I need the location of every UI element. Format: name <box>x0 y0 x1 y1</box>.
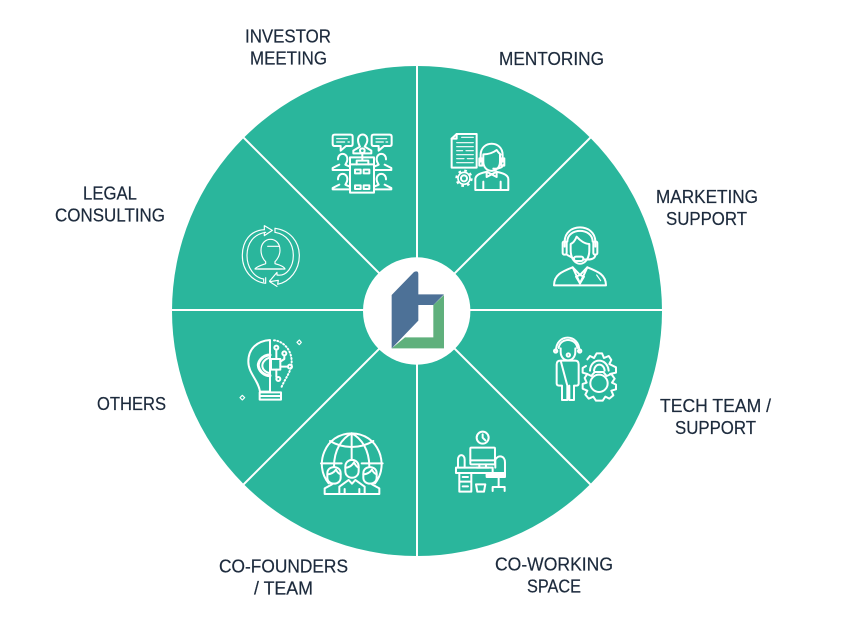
label: co-working space: CO-WORKING <box>495 554 613 574</box>
label: others: OTHERS <box>97 394 166 414</box>
label: co-working space <box>495 554 613 596</box>
icon: mentoring <box>452 134 508 190</box>
wheel: eight teal segments <box>166 60 668 562</box>
label: legal consulting: CONSULTING <box>55 206 165 226</box>
label: tech team support <box>660 396 771 438</box>
icon: legal consulting <box>242 226 299 286</box>
label: investor meeting <box>245 26 331 68</box>
label: co-working space: SPACE <box>527 576 581 596</box>
label: tech team support: TECH TEAM / <box>660 396 771 416</box>
icon: co-working space desk <box>456 432 505 492</box>
label: legal consulting: LEGAL <box>83 184 137 204</box>
label: marketing support <box>656 187 758 229</box>
icon: co-founders team globe <box>321 433 383 494</box>
label: marketing support: SUPPORT <box>666 209 747 229</box>
label: investor meeting: MEETING <box>250 48 327 68</box>
icon: tech team support <box>554 338 616 401</box>
icon: marketing support headset <box>554 227 606 285</box>
label: co-founders team <box>219 556 348 598</box>
label: legal consulting <box>55 184 165 226</box>
center logo <box>363 257 470 365</box>
label: marketing support: MARKETING <box>656 187 758 207</box>
label: co-founders team: / TEAM <box>254 578 313 598</box>
label: co-founders team: CO-FOUNDERS <box>219 556 348 576</box>
label: mentoring: MENTORING <box>499 49 604 69</box>
icon: investor meeting <box>333 134 392 193</box>
label: tech team support: SUPPORT <box>675 418 756 438</box>
icon: others idea bulb <box>240 340 301 400</box>
label: investor meeting: INVESTOR <box>245 26 331 46</box>
